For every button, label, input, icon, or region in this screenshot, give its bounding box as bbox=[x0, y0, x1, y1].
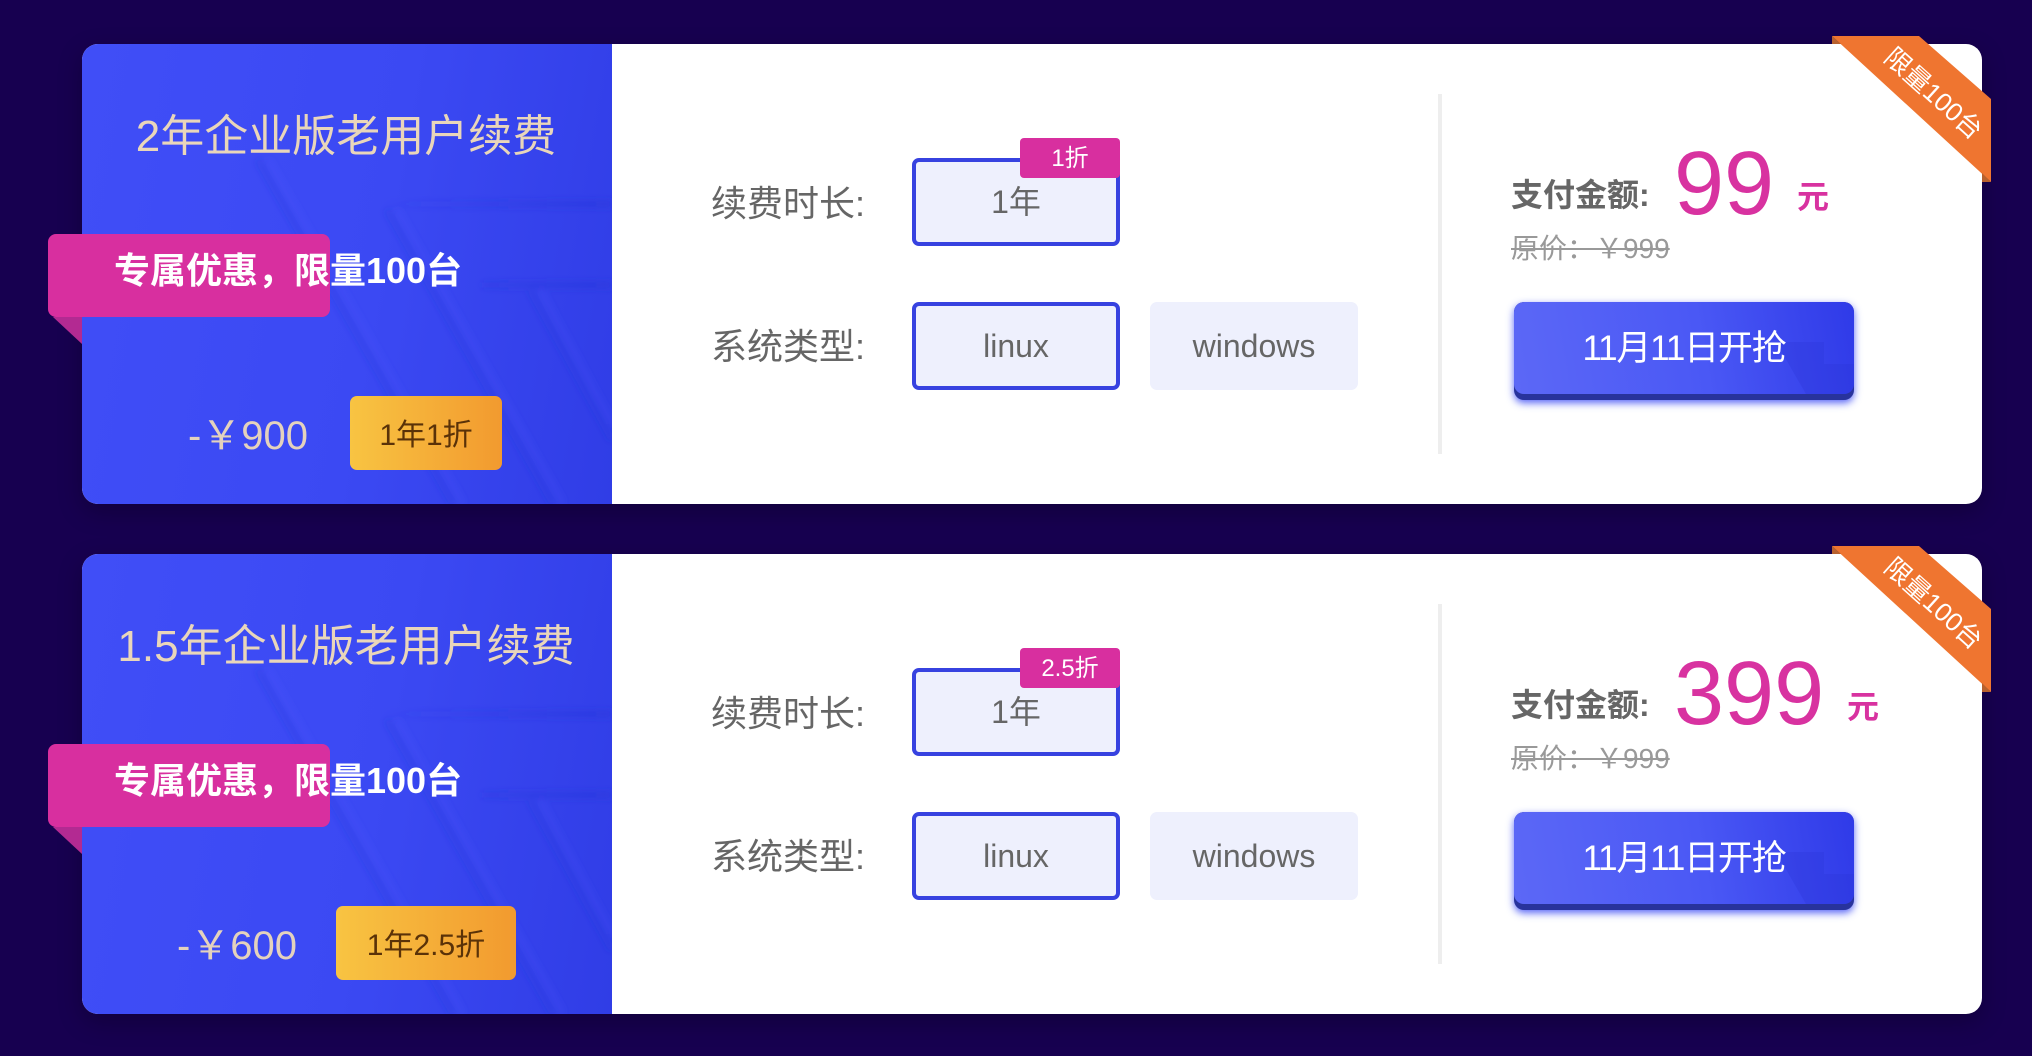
ribbon fold bbox=[53, 827, 82, 854]
option: windows bbox=[1150, 302, 1358, 390]
card: 1.5-year renewal bbox=[82, 554, 1982, 1014]
discount amount: -￥900 bbox=[188, 414, 308, 458]
option: 1 year: 1年 bbox=[991, 694, 1041, 730]
ribbon text: 专属优惠，限量100台 bbox=[114, 760, 462, 801]
pay label: 支付金额: bbox=[1511, 177, 1650, 213]
option: 1 year bbox=[912, 668, 1120, 756]
button text: 11月11日开抢 bbox=[1582, 328, 1786, 368]
price: 399 bbox=[1674, 644, 1824, 744]
panel: offer summary bbox=[82, 554, 612, 1014]
original price: 原价：￥999 bbox=[1511, 233, 1670, 264]
discount tag bbox=[1020, 138, 1120, 178]
corner ribbon text: 限量100台 bbox=[1879, 41, 1989, 145]
ribbon bbox=[48, 234, 330, 317]
discount badge: 1年1折 bbox=[379, 418, 473, 452]
ribbon bbox=[48, 744, 330, 827]
pay label: 支付金额: bbox=[1511, 687, 1650, 723]
ribbon text: 专属优惠，限量100台 bbox=[114, 250, 462, 291]
discount badge: 1年2.5折 bbox=[367, 928, 485, 962]
option: 1 year: 1年 bbox=[991, 184, 1041, 220]
heading: 1.5年企业版老用户续费 bbox=[117, 622, 575, 671]
button text: 11月11日开抢 bbox=[1582, 838, 1786, 878]
corner ribbon bbox=[1832, 36, 1991, 182]
option: linux bbox=[912, 812, 1120, 900]
background streaks bbox=[258, 166, 294, 230]
unit: 元 bbox=[1847, 689, 1879, 725]
button bbox=[1514, 302, 1854, 400]
option: linux bbox=[912, 302, 1120, 390]
discount tag: 2.5折 bbox=[1041, 655, 1099, 682]
corner ribbon bbox=[1832, 546, 1991, 692]
card: 2-year renewal bbox=[82, 44, 1982, 504]
button face bbox=[1514, 302, 1854, 394]
button streaks bbox=[1514, 812, 1854, 904]
corner ribbon text: 限量100台 bbox=[1879, 551, 1989, 655]
discount badge bbox=[350, 396, 502, 470]
background streaks bbox=[258, 676, 294, 740]
discount tag bbox=[1020, 648, 1120, 688]
ribbon fold bbox=[53, 317, 82, 344]
heading: 2年企业版老用户续费 bbox=[136, 112, 556, 161]
option: linux: linux bbox=[983, 328, 1049, 364]
discount amount: -￥600 bbox=[177, 924, 297, 968]
label: system: 系统类型: bbox=[711, 836, 865, 877]
panel: offer summary bbox=[82, 44, 612, 504]
label: system: 系统类型: bbox=[711, 326, 865, 367]
label: duration: 续费时长: bbox=[711, 183, 865, 224]
option: windows: windows bbox=[1193, 838, 1315, 874]
divider bbox=[1438, 604, 1442, 964]
divider bbox=[1438, 94, 1442, 454]
option: 1 year bbox=[912, 158, 1120, 246]
option: windows bbox=[1150, 812, 1358, 900]
unit: 元 bbox=[1797, 179, 1829, 215]
discount badge bbox=[336, 906, 516, 980]
option: windows: windows bbox=[1193, 328, 1315, 364]
label: duration: 续费时长: bbox=[711, 693, 865, 734]
button streaks bbox=[1514, 302, 1854, 394]
button bbox=[1514, 812, 1854, 910]
option: linux: linux bbox=[983, 838, 1049, 874]
price: 99 bbox=[1674, 134, 1774, 234]
button face bbox=[1514, 812, 1854, 904]
discount tag: 1折 bbox=[1051, 145, 1089, 172]
original price: 原价：￥999 bbox=[1511, 743, 1670, 774]
